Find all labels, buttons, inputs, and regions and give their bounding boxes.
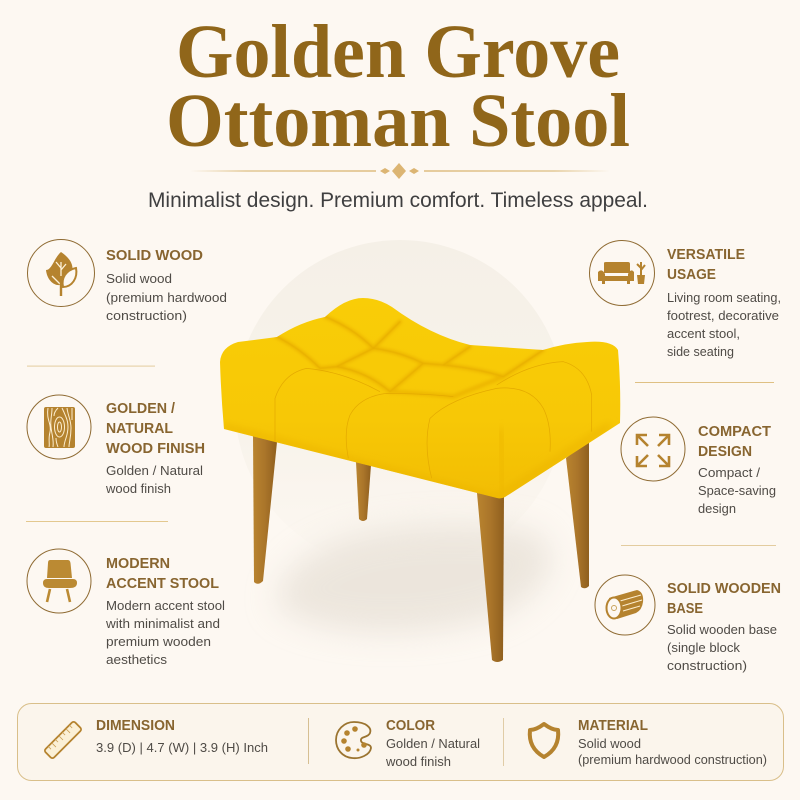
description: (single block [667,640,740,655]
heading: COMPACT [698,424,771,440]
heading: GOLDEN / [106,401,175,417]
description [106,271,227,323]
value: wood finish [385,754,451,769]
icon: ruler [44,721,82,759]
cushion [220,298,620,498]
heading: COLOR [386,718,435,734]
stitched seams [275,362,592,478]
leg: front right [477,493,504,662]
description: Space-saving [698,483,776,498]
panel: specifications [18,704,784,780]
heading: MODERN [106,556,170,572]
icon: log [595,575,655,635]
icon: expand arrows [621,417,685,481]
description: design [698,501,736,516]
heading: NATURAL [106,421,173,437]
heading [106,401,205,457]
heading [667,581,781,617]
value [385,736,480,769]
description: Modern accent stool [106,598,225,613]
heading: VERSATILE [667,247,745,263]
leg: rear right [566,440,589,588]
feature: compact design [621,417,776,516]
value: 3.9 (D) | 4.7 (W) | 3.9 (H) Inch [96,740,268,755]
icon: wood grain [27,395,91,459]
description [667,290,781,359]
description: Solid wooden base [667,622,777,637]
description: aesthetics [106,652,168,667]
heading: SOLID WOODEN [667,581,781,597]
heading: ACCENT STOOL [106,576,219,592]
description: (premium hardwood [106,290,227,305]
heading: DIMENSION [96,718,175,734]
subtitle: Minimalist design. Premium comfort. Timeless appeal. [148,189,648,212]
icon: chair [27,549,91,613]
cushion shading [223,317,610,498]
feature: golden natural wood finish [27,395,205,496]
heading [698,424,771,460]
description [105,463,203,496]
title: Golden Grove [176,10,620,94]
value: (premium hardwood construction) [578,752,767,767]
description: premium wooden [106,634,211,649]
icon: leaf [28,240,94,306]
heading: SOLID WOOD [106,248,203,264]
leg: rear left [356,462,371,521]
backdrop circle [235,240,565,570]
description [105,598,225,667]
value [578,736,767,767]
title: Ottoman Stool [166,79,630,163]
description: Solid wood [106,271,172,286]
icon: palette [336,722,371,758]
feature: solid wooden base [595,575,781,673]
description: Golden / Natural [106,463,203,478]
feature: modern accent stool [27,549,225,667]
tuft crease lines [277,316,544,367]
heading: USAGE [667,267,716,283]
description: footrest, decorative [667,308,779,323]
value: Solid wood [578,736,641,751]
spec: material [530,718,767,767]
spec: dimension [44,718,268,759]
heading: WOOD FINISH [106,441,205,457]
description [667,622,777,673]
icon: shield [530,724,558,757]
value: Golden / Natural [386,736,480,751]
heading [667,247,745,283]
description: accent stool, [667,326,740,341]
feature: solid wood [28,240,227,323]
floor shadow [275,525,551,633]
description: Living room seating, [667,290,781,305]
description: Compact / [698,465,760,480]
description: construction) [667,658,747,673]
description: wood finish [105,481,171,496]
icon: sofa and plant [590,240,654,306]
heading: DESIGN [698,444,752,460]
title [166,10,630,163]
tuft soft creases [277,317,543,397]
spec: color [336,718,480,769]
description [698,465,776,516]
leg: front left [253,435,277,584]
description: construction) [106,308,187,323]
feature: versatile usage [590,240,781,359]
ornamental divider [190,163,610,179]
product: yellow tufted stool [220,298,620,662]
heading [106,556,219,592]
description: side seating [667,344,734,359]
heading: BASE [667,601,703,617]
description: with minimalist and [105,616,220,631]
heading: MATERIAL [578,718,648,734]
